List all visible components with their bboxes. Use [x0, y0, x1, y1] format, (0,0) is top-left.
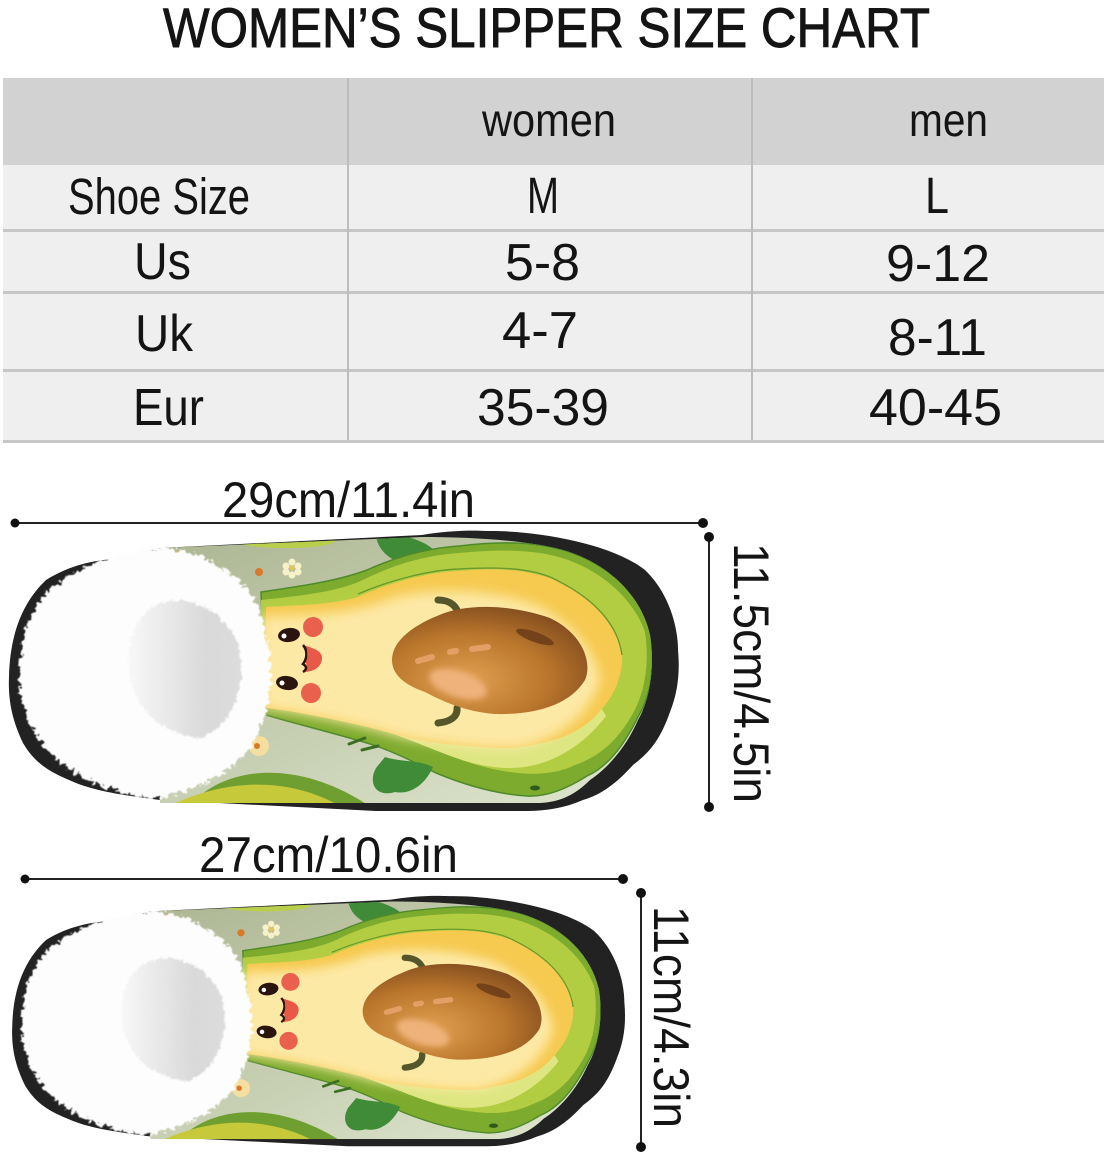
small avocado top: [242, 540, 335, 548]
top leaf: [348, 902, 400, 922]
men's length dimension: [20, 827, 628, 884]
slipper: small avocado: [12, 895, 626, 1150]
sole: [9, 531, 679, 811]
row: eur: Eur: [133, 379, 204, 437]
lower avocado: [180, 1112, 338, 1140]
seeds on rind: [349, 738, 378, 750]
row: uk: [135, 302, 987, 367]
avocado rind: [243, 907, 601, 1133]
fleece inner shadow: [128, 600, 241, 738]
pit shine marks: [418, 647, 488, 661]
small avocado top: [225, 904, 311, 912]
avocado pit: [363, 964, 542, 1060]
header: women: women: [481, 94, 616, 146]
white fleece collar: [22, 911, 251, 1134]
avocado pale lower band: [366, 1055, 558, 1108]
row: uk: 4-7: [502, 302, 578, 360]
avocado flesh: [247, 930, 573, 1090]
avocado flesh: [266, 569, 622, 748]
white fleece collar: [20, 548, 270, 798]
flowers: [175, 551, 302, 756]
row: uk: Uk: [135, 305, 194, 363]
pit stem bottom: [405, 1054, 422, 1068]
seeds on rind: [323, 1081, 350, 1092]
women's length dimension: [10, 472, 708, 528]
fabric background: [150, 902, 600, 1140]
header: men: men: [909, 94, 988, 146]
flesh pale centre: [244, 950, 553, 1090]
avocado light band: [261, 551, 647, 774]
pit highlight: [426, 666, 489, 702]
face: [256, 973, 300, 1050]
row: uk: 8-11: [888, 309, 987, 367]
flesh outline: [358, 568, 622, 655]
pit shine marks: [386, 1000, 451, 1012]
lower leaf: [373, 757, 433, 793]
row: eur: [133, 379, 1002, 437]
pit stem bottom: [438, 708, 457, 723]
row: shoe size: L: [925, 167, 949, 224]
flesh pale centre: [262, 591, 600, 748]
size table: [3, 78, 1104, 443]
row: shoe size: M: [527, 167, 559, 224]
pit highlight: [394, 1016, 452, 1050]
slipper: large avocado: [9, 530, 680, 815]
row: eur: 40-45: [869, 379, 1002, 437]
top leaf: [376, 538, 432, 559]
pit stem top: [405, 958, 424, 974]
avocado pale lower band: [394, 709, 606, 768]
women's length dimension: 29cm/11.4in: [222, 472, 475, 528]
fleece inner shadow: [121, 958, 225, 1081]
lower avocado: [204, 772, 364, 803]
row: us: Us: [134, 233, 191, 291]
row: us: 9-12: [886, 235, 990, 293]
row: shoe size: [68, 167, 949, 225]
sole: [12, 896, 625, 1146]
face: [275, 617, 323, 703]
avocado pit: [392, 607, 587, 714]
pit stem top: [438, 600, 459, 618]
avocado light band: [243, 914, 596, 1113]
row: eur: 35-39: [477, 379, 609, 437]
rind spot: [489, 1123, 498, 1128]
men's height dimension: 11cm/4.3in: [643, 906, 699, 1128]
women's height dimension: [704, 532, 779, 812]
row: us: [134, 233, 990, 293]
flesh outline: [332, 929, 573, 1007]
lower leaf: [345, 1098, 400, 1130]
pit dark mark: [475, 981, 512, 1001]
avocado rind: [261, 543, 653, 796]
pit dark mark: [516, 628, 554, 646]
women's height dimension: 11.5cm/4.5in: [723, 543, 779, 803]
rind spot: [530, 786, 540, 790]
flowers: [164, 914, 280, 1097]
men's length dimension: 27cm/10.6in: [199, 827, 458, 883]
fabric background: [160, 537, 652, 803]
row: us: 5-8: [505, 234, 580, 292]
row: shoe size: Shoe Size: [68, 168, 250, 225]
